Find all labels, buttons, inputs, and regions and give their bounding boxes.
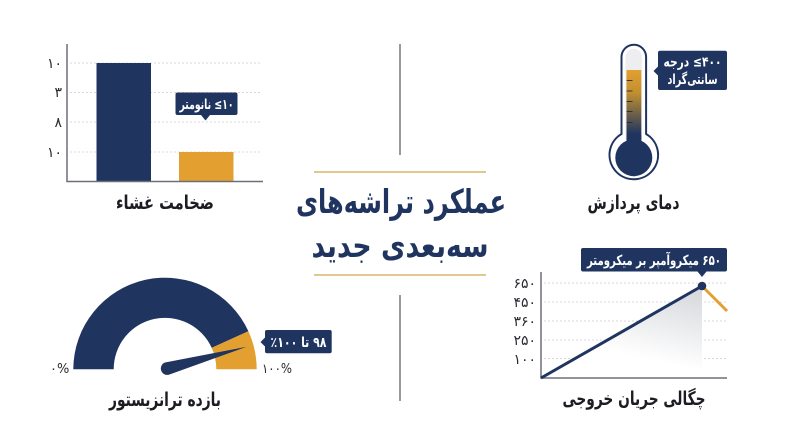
tick marks [626,80,632,122]
peak marker [698,282,706,290]
navy rising line [541,286,702,378]
y axis labels: ۸ [54,115,62,131]
heading: transistor efficiency: بازده ترانزیستور [108,389,221,411]
heading: output current density: چگالی جریان خروجی [562,387,706,410]
heading: processing temperature: دمای پردازش [588,192,680,214]
y axis labels [47,56,62,161]
temperature fill [626,70,641,145]
line chart: output current density [513,248,727,378]
tooltip: efficiency value [260,330,332,353]
divider: lower [399,295,401,401]
bar chart: film thickness [47,44,263,182]
thermometer bulb [615,139,652,176]
y axis labels: ۱۰ [47,56,62,72]
y axis labels: ۲۵۰ [513,333,536,349]
tooltip: current density value: ۶۵۰ میکروآمپر بر میکرومتر [586,251,721,269]
tooltip: temperature value: ۴۰۰≥ درجه [664,54,722,70]
tooltip: temperature value: سانتی‌گراد [668,71,718,88]
heading: film thickness: ضخامت غشاء [116,192,214,214]
y axis labels: ۳۶۰ [513,314,536,330]
y axis labels: ۴۵۰ [513,295,536,311]
y axis labels: ۱۰ [47,145,62,161]
y axis labels: ۳ [54,85,62,101]
tooltip: temperature value [654,51,727,90]
chart axes [67,44,263,182]
title block: سه‌بعدی جدید [312,226,488,265]
tooltip: current density value [581,248,727,277]
title block: عملکرد تراشه‌های [296,182,506,222]
gold bar [179,152,234,182]
needle [161,347,247,375]
gold arc [212,331,257,369]
tube interior [626,49,642,140]
title block [296,172,506,275]
tooltip: thickness value: ۱۰≥ نانومتر [179,97,234,113]
y axis labels: ۱۰۰ [513,352,536,368]
y axis labels: ۶۵۰ [513,276,536,292]
tooltip: thickness value [176,92,238,120]
shaded area [541,286,702,378]
navy arc [73,278,248,369]
tube base [626,135,641,147]
thermometer outline [610,45,658,179]
divider: upper [399,44,401,155]
navy bar [96,63,151,182]
gold falling segment [702,286,727,311]
gauge end labels: ۰% [50,362,69,377]
gauge: transistor efficiency [50,278,332,377]
gauge: transistor efficiency: ۱۰۰% [262,362,292,377]
chart axes [541,272,727,378]
y axis labels [513,276,536,368]
thermometer [610,45,658,179]
tooltip: efficiency value: ۹۸ تا ۱۰۰٪ [270,335,327,351]
